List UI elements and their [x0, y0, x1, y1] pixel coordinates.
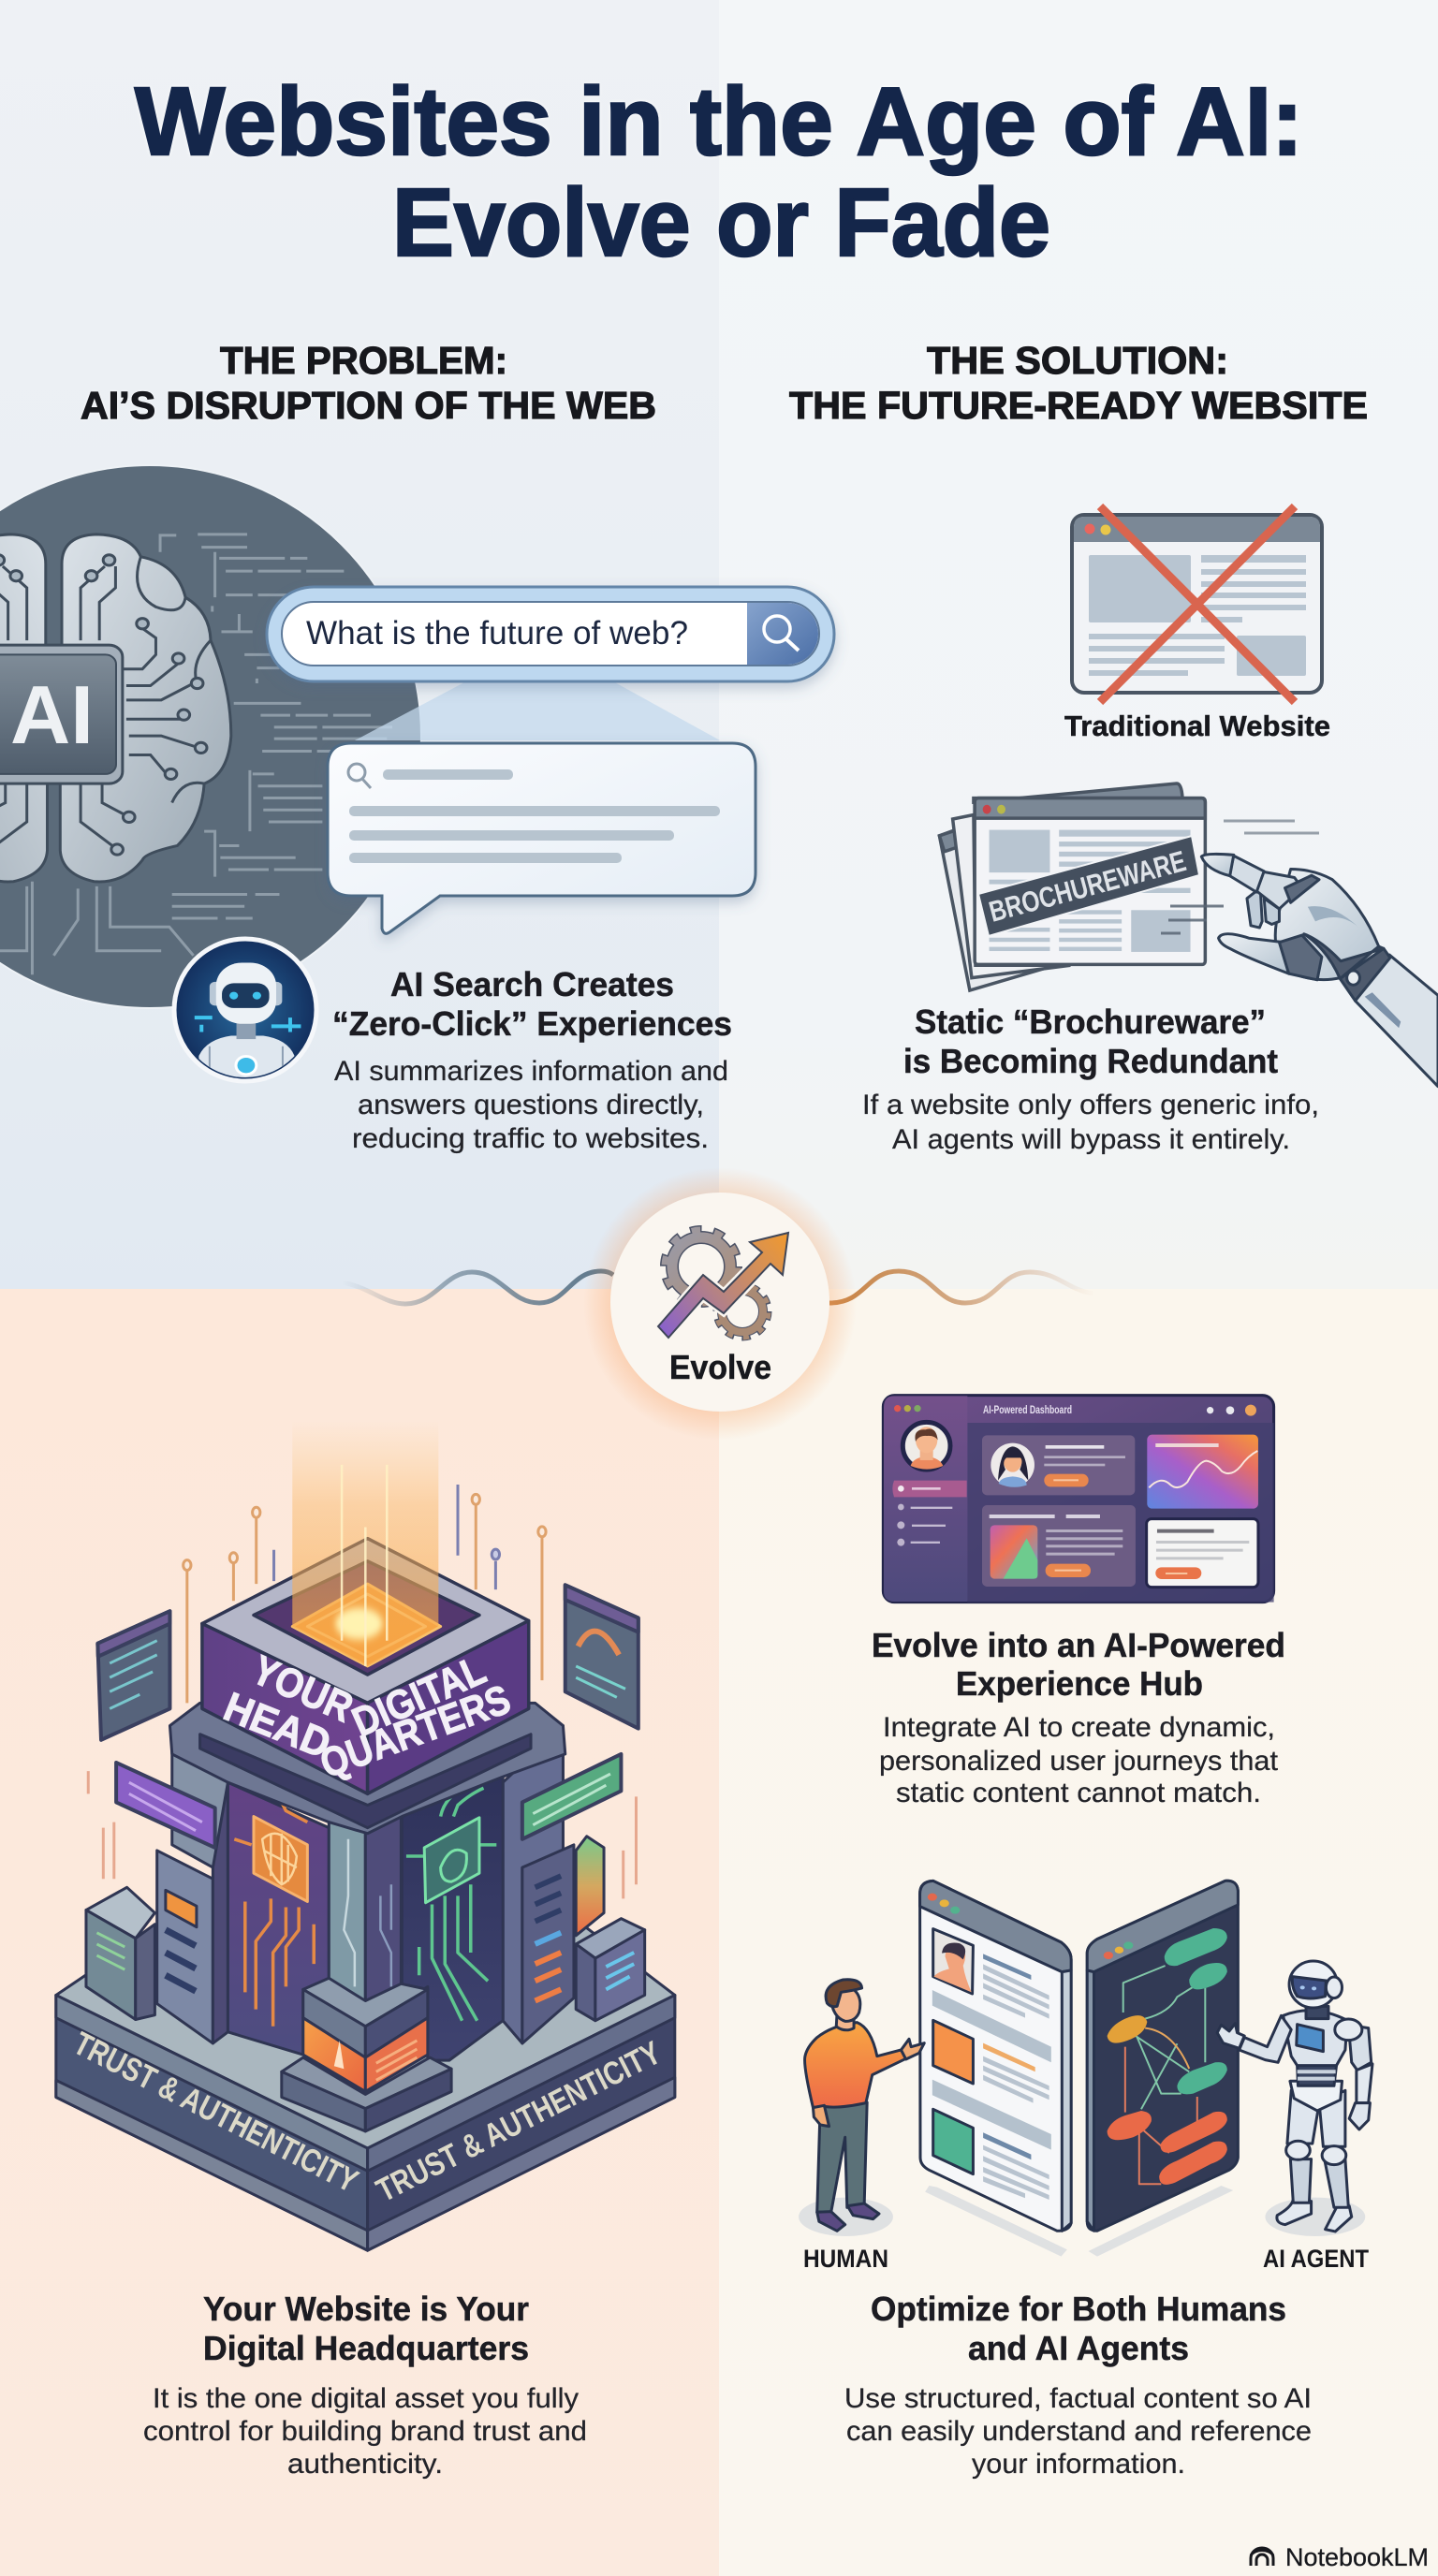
text: experience hub: personalized user journeys that: [879, 1746, 1279, 1777]
text: digital headquarters: Your Website is Your: [203, 2290, 529, 2328]
robot figure: [1217, 1961, 1372, 2232]
text: digital headquarters: [143, 2290, 587, 2480]
floating panels: [97, 1585, 638, 1848]
evolve divider: [342, 1167, 1093, 1441]
human figure: [805, 1980, 924, 2231]
title: Evolve or Fade: [392, 168, 1050, 276]
base platform: [56, 1922, 675, 2250]
illustration: AI experience dashboard: [883, 1396, 1274, 1603]
text: AI search: [332, 965, 732, 1154]
pedestal: [282, 1978, 451, 2131]
text: brochureware: If a website only offers generic info,: [862, 1090, 1319, 1120]
search bar: [267, 587, 834, 681]
left server tower: [157, 1726, 227, 2043]
heading: the problem: AI’S DISRUPTION OF THE WEB: [81, 384, 656, 427]
floating pylons: [88, 1485, 636, 1898]
left block: [86, 1887, 154, 2020]
robot hand: [1201, 854, 1438, 1087]
central walls: [227, 1771, 503, 2060]
text: brochureware: [862, 1003, 1319, 1155]
right block and server: [503, 1726, 645, 2043]
base text: trust and authenticity: [67, 2025, 667, 2209]
title: [135, 67, 1303, 276]
heading: the solution: [789, 339, 1368, 427]
red cross: [1100, 506, 1295, 702]
wave left: [342, 1271, 613, 1304]
text: optimize: can easily understand and reference: [846, 2416, 1312, 2447]
text: brochureware: AI agents will bypass it entirely.: [892, 1124, 1290, 1155]
text: experience hub: Experience Hub: [956, 1664, 1203, 1703]
text: digital headquarters: It is the one digital asset you fully: [153, 2383, 579, 2414]
text: AI search: “Zero-Click” Experiences: [332, 1004, 732, 1043]
text: experience hub: [872, 1626, 1285, 1808]
illustration: AI brain with search: [0, 465, 834, 1085]
illustration: human and AI agent: [799, 1881, 1372, 2273]
text: AI search: AI summarizes information and: [334, 1056, 728, 1087]
title: Websites in the Age of AI:: [135, 67, 1303, 175]
text: optimize: your information.: [972, 2449, 1185, 2480]
sign: your digital headquarters: [217, 1647, 517, 1787]
centre column: [329, 1796, 401, 2004]
light beam: [292, 1419, 438, 1666]
label: AI agent: AI AGENT: [1263, 2245, 1369, 2273]
speed lines: [1161, 821, 1319, 933]
evolve disc: [610, 1193, 829, 1412]
icon: gears and rising arrow: [658, 1231, 788, 1338]
text: optimize: [844, 2290, 1312, 2480]
illustration: digital headquarters: [56, 1419, 675, 2250]
search bar: What is the future of web?: [306, 615, 688, 651]
label: human: HUMAN: [803, 2245, 888, 2273]
text: digital headquarters: Digital Headquarters: [203, 2329, 529, 2367]
base text: trust and authenticity: TRUST & AUTHENTICITY: [67, 2025, 364, 2200]
answer beam: [355, 666, 720, 740]
text: AI search: answers questions directly,: [358, 1090, 704, 1120]
text: brochureware: Static “Brochureware”: [915, 1003, 1266, 1041]
brochure stack: [939, 783, 1205, 990]
heading: the solution: THE SOLUTION:: [927, 339, 1228, 382]
heading: the solution: THE FUTURE-READY WEBSITE: [789, 384, 1368, 427]
illustration: traditional website crossed out: [1064, 506, 1330, 742]
text: experience hub: Integrate AI to create dynamic,: [883, 1712, 1275, 1743]
orange glow: [583, 1167, 857, 1441]
text: digital headquarters: authenticity.: [287, 2449, 443, 2480]
circuit lines: [219, 1749, 509, 2027]
AI chip label: AI: [10, 668, 94, 761]
text: optimize: Use structured, factual content so AI: [844, 2383, 1312, 2414]
evolve label: Evolve: [669, 1348, 771, 1386]
heading: the problem: THE PROBLEM:: [220, 339, 507, 382]
text: AI search: reducing traffic to websites.: [352, 1123, 709, 1154]
sign: your digital headquarters: DIGITAL: [345, 1647, 492, 1746]
text: brochureware: is Becoming Redundant: [903, 1042, 1278, 1080]
web page panel: [920, 1881, 1071, 2231]
wave right: [829, 1271, 1093, 1303]
label: traditional website: Traditional Website: [1064, 710, 1330, 742]
brochureware stamp: BROCHUREWARE: [986, 844, 1189, 929]
text: optimize: and AI Agents: [968, 2329, 1189, 2367]
glowing chip right: [424, 1818, 479, 1903]
crown box: [202, 1539, 529, 1793]
text: digital headquarters: control for building brand trust and: [143, 2416, 587, 2447]
base text: trust and authenticity: TRUST & AUTHENTICITY: [371, 2034, 667, 2209]
heading: the problem: [81, 339, 656, 427]
text: experience hub: static content cannot match.: [896, 1778, 1261, 1808]
text: optimize: Optimize for Both Humans: [871, 2290, 1286, 2328]
robot avatar: [174, 939, 316, 1085]
answer speech bubble: [328, 743, 756, 933]
text: AI search: AI Search Creates: [390, 965, 674, 1003]
data panel: [1087, 1881, 1238, 2231]
notebooklm badge: NotebookLM: [1285, 2543, 1429, 2571]
glowing chip left: [254, 1817, 307, 1901]
text: experience hub: Evolve into an AI-Powered: [872, 1626, 1285, 1664]
brain: [0, 534, 231, 882]
crown collar: [169, 1703, 565, 1834]
dark circle with code: [0, 465, 421, 1008]
floor shadows: [799, 2186, 1365, 2257]
sign: your digital headquarters: QUARTERS: [315, 1676, 517, 1787]
dashboard header label: AI-Powered Dashboard: [983, 1403, 1072, 1416]
sign: your digital headquarters: YOUR: [245, 1647, 360, 1732]
sign: your digital headquarters: HEAD: [217, 1684, 337, 1767]
illustration: brochureware and robot hand: [939, 783, 1438, 1087]
